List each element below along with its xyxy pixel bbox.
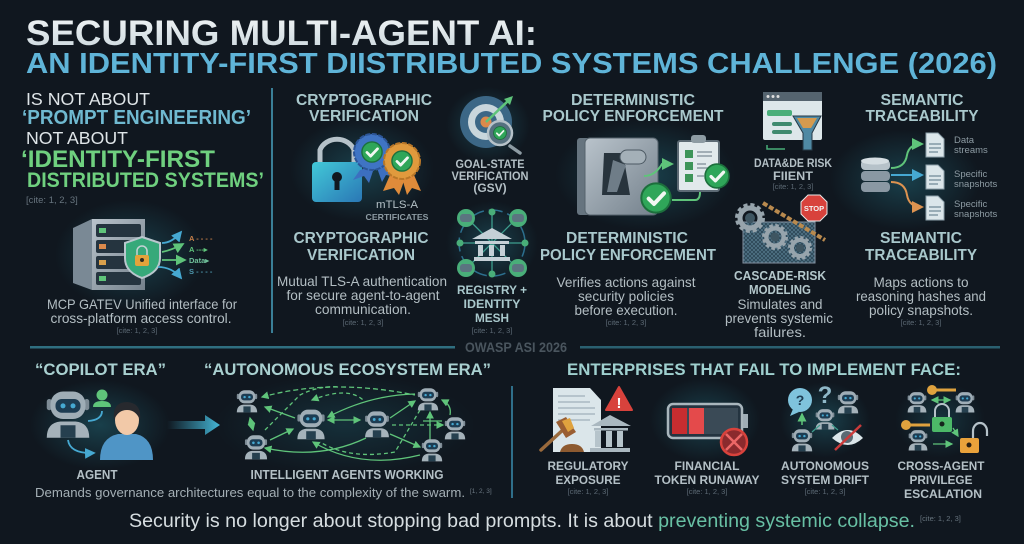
label: GOAL-STATE (456, 157, 524, 171)
panel: data risk filter (754, 92, 832, 191)
text: gateway description: MCP GATEV Unified interface for (47, 297, 237, 312)
heading: SEMANTIC (880, 92, 964, 109)
text: gateway description: cross-platform access control. (50, 311, 231, 326)
label: [cite: 1, 2, 3] (805, 487, 845, 496)
heading: DETERMINISTIC (571, 92, 695, 109)
footer statement: [cite: 1, 2, 3] (920, 514, 961, 523)
subheading (540, 230, 716, 264)
label: FIIENT (773, 169, 814, 183)
label and description: MODELING (749, 282, 811, 297)
panel: left statement: ‘PROMPT ENGINEERING’ (22, 107, 251, 129)
label: CROSS-AGENT (898, 459, 985, 473)
text: governance note: [1, 2, 3] (470, 488, 492, 495)
text: traceability description: policy snapshots. (869, 303, 973, 318)
text: gateway data labels: A ---▸ (189, 245, 209, 254)
label: PRIVILEGE (910, 473, 972, 487)
label: SYSTEM DRIFT (781, 473, 870, 487)
text: governance note: Demands governance architectures equal to the complexity of the swarm. (35, 485, 465, 500)
label: [cite: 1, 2, 3] (472, 326, 512, 335)
label: [cite: 1, 2, 3] (773, 182, 813, 191)
label: INTELLIGENT AGENTS WORKING (250, 468, 444, 482)
text: data labels (954, 135, 998, 220)
icon: identity mesh (456, 208, 528, 278)
text: data labels: snapshots (954, 179, 998, 190)
panel: left statement: [cite: 1, 2, 3] (26, 195, 78, 206)
text: gateway data labels: A - - - - (189, 234, 213, 243)
heading: “AUTONOMOUS ECOSYSTEM ERA” (204, 360, 491, 379)
label and description (725, 268, 833, 340)
risk: autonomous system drift (780, 382, 870, 496)
label (781, 459, 870, 496)
text: traceability description (856, 275, 986, 327)
text: crypto description: Mutual TLS-A authentication (277, 274, 447, 289)
risk: financial token runaway (650, 378, 760, 496)
text: policy description: Verifies actions against (556, 275, 696, 290)
label: DATA&DE RISK (754, 156, 832, 170)
text: crypto description (277, 274, 447, 327)
panel: left statement: NOT ABOUT (26, 128, 128, 148)
label and description: failures. (754, 325, 806, 340)
icon: keys, agents and locks (901, 385, 987, 453)
icon: drifting agents: ? (818, 382, 832, 409)
label (898, 459, 985, 501)
icon: window and funnel (763, 92, 822, 150)
subheading (294, 230, 429, 264)
title: SECURING MULTI-AGENT AI: (26, 14, 537, 53)
label: VERIFICATION (452, 169, 528, 183)
text: gateway description (47, 297, 237, 335)
label: REGULATORY (548, 459, 628, 473)
icon: gateway output arrows (158, 232, 185, 278)
icon: target (460, 96, 520, 153)
label: AUTONOMOUS (781, 459, 869, 473)
icon: gears, chain and stop sign (737, 195, 827, 263)
label: OWASP: OWASP ASI 2026 (465, 340, 567, 355)
label: AGENT (76, 468, 118, 482)
panel: cryptographic verification (277, 92, 447, 327)
icon: drifting agents (788, 382, 863, 451)
label: ESCALATION (904, 487, 982, 501)
label (457, 283, 527, 335)
text: crypto description: communication. (315, 302, 411, 317)
subheading: CRYPTOGRAPHIC (294, 230, 429, 247)
text: crypto description: [cite: 1, 2, 3] (343, 318, 383, 327)
text: data labels: Data (954, 135, 975, 146)
heading (542, 92, 724, 125)
icon: padlock and badges (312, 134, 421, 202)
label: EXPOSURE (556, 473, 620, 487)
text: gateway data labels: S - - - - (189, 267, 213, 276)
panel: left statement: IS NOT ABOUT (26, 89, 150, 109)
label (754, 156, 832, 191)
risk: regulatory exposure (541, 387, 632, 496)
icon: depleted battery (668, 404, 748, 455)
label: mTLS-A certificates: mTLS-A (376, 199, 419, 211)
divider lines (30, 88, 1000, 498)
footer statement: Security is no longer about stopping bad prompts. It is about preventing systemic collapse. (129, 511, 915, 532)
icon: clipboard checklist (644, 135, 729, 200)
icon: drifting agents: ? (796, 392, 804, 408)
heading: VERIFICATION (309, 108, 419, 125)
label (654, 459, 760, 496)
label: IDENTITY (464, 297, 520, 311)
arrow: copilot to ecosystem (167, 415, 220, 435)
text: data labels: Specific (954, 169, 988, 180)
text: gateway data labels: Data▸ (189, 256, 210, 265)
heading (866, 92, 979, 125)
text: traceability description: Maps actions to (874, 275, 968, 290)
heading (296, 92, 432, 125)
subheading: POLICY ENFORCEMENT (540, 247, 716, 264)
text: policy description: before execution. (574, 303, 678, 318)
text: policy description: security policies (578, 289, 674, 304)
label: REGISTRY + (457, 283, 527, 297)
label: [cite: 1, 2, 3] (568, 487, 608, 496)
label and description: CASCADE-RISK (734, 268, 827, 283)
label: mTLS-A certificates: CERTIFICATES (366, 212, 429, 222)
panel: left statement: ‘IDENTITY-FIRST (21, 146, 215, 173)
icon: kill switch (577, 138, 671, 215)
subheading: DETERMINISTIC (566, 230, 688, 247)
subheading: SEMANTIC (880, 230, 962, 247)
panel: deterministic policy enforcement (540, 92, 735, 327)
text: gateway description: [cite: 1, 2, 3] (117, 326, 157, 335)
risk: cross-agent privilege escalation (895, 382, 987, 501)
subheading: VERIFICATION (307, 247, 415, 264)
label: mTLS-A certificates (366, 199, 429, 222)
text: gateway data labels (189, 234, 213, 276)
diagram: agent swarm links (250, 387, 450, 460)
panel: cascade-risk modeling (725, 195, 833, 340)
text: traceability description: reasoning hashes and (856, 289, 986, 304)
text: data labels: snapshots (954, 209, 998, 220)
heading: “COPILOT ERA” (35, 360, 166, 379)
heading: CRYPTOGRAPHIC (296, 92, 432, 109)
panel: goal-state verification (446, 87, 530, 195)
icon: gears, chain and stop sign: STOP (804, 204, 824, 213)
panel: autonomous ecosystem era (204, 360, 491, 482)
subheading (865, 230, 977, 264)
heading: POLICY ENFORCEMENT (542, 108, 724, 125)
label (548, 459, 628, 496)
text: crypto description: for secure agent-to-agent (286, 288, 440, 303)
panel: copilot era (30, 360, 170, 482)
text: policy description: [cite: 1, 2, 3] (606, 318, 646, 327)
label: [cite: 1, 2, 3] (687, 487, 727, 496)
icon: document, gavel, bank: ! (616, 395, 622, 412)
icon: server with shield (73, 219, 160, 290)
panel: MCP gateway (47, 200, 237, 335)
title (26, 14, 997, 80)
title: AN IDENTITY-FIRST DIISTRIBUTED SYSTEMS CHALLENGE (2026) (26, 48, 997, 80)
icon: database with branching arrows (861, 133, 944, 220)
label: FINANCIAL (674, 459, 740, 473)
panel: registry and identity mesh (446, 201, 538, 335)
subheading: TRACEABILITY (865, 247, 977, 264)
heading: TRACEABILITY (866, 108, 979, 125)
label (452, 157, 528, 195)
label: TOKEN RUNAWAY (654, 473, 760, 487)
icon: robot and person (47, 390, 153, 460)
label and description: prevents systemic (725, 311, 833, 326)
label and description: Simulates and (738, 297, 822, 312)
panel: semantic traceability (830, 92, 998, 327)
text: data labels: Specific (954, 199, 988, 210)
text: policy description (556, 275, 696, 327)
heading: ENTERPRISES THAT FAIL TO IMPLEMENT FACE: (567, 360, 961, 379)
icon: agents (237, 388, 465, 461)
label: (GSV) (473, 181, 507, 195)
label: MESH (475, 311, 509, 325)
panel: left statement: DISTRIBUTED SYSTEMS’ (27, 169, 264, 192)
panel: left statement (21, 89, 264, 206)
text: data labels: streams (954, 145, 988, 156)
panel: enterprise risks (541, 360, 987, 501)
text: traceability description: [cite: 1, 2, 3] (901, 318, 941, 327)
